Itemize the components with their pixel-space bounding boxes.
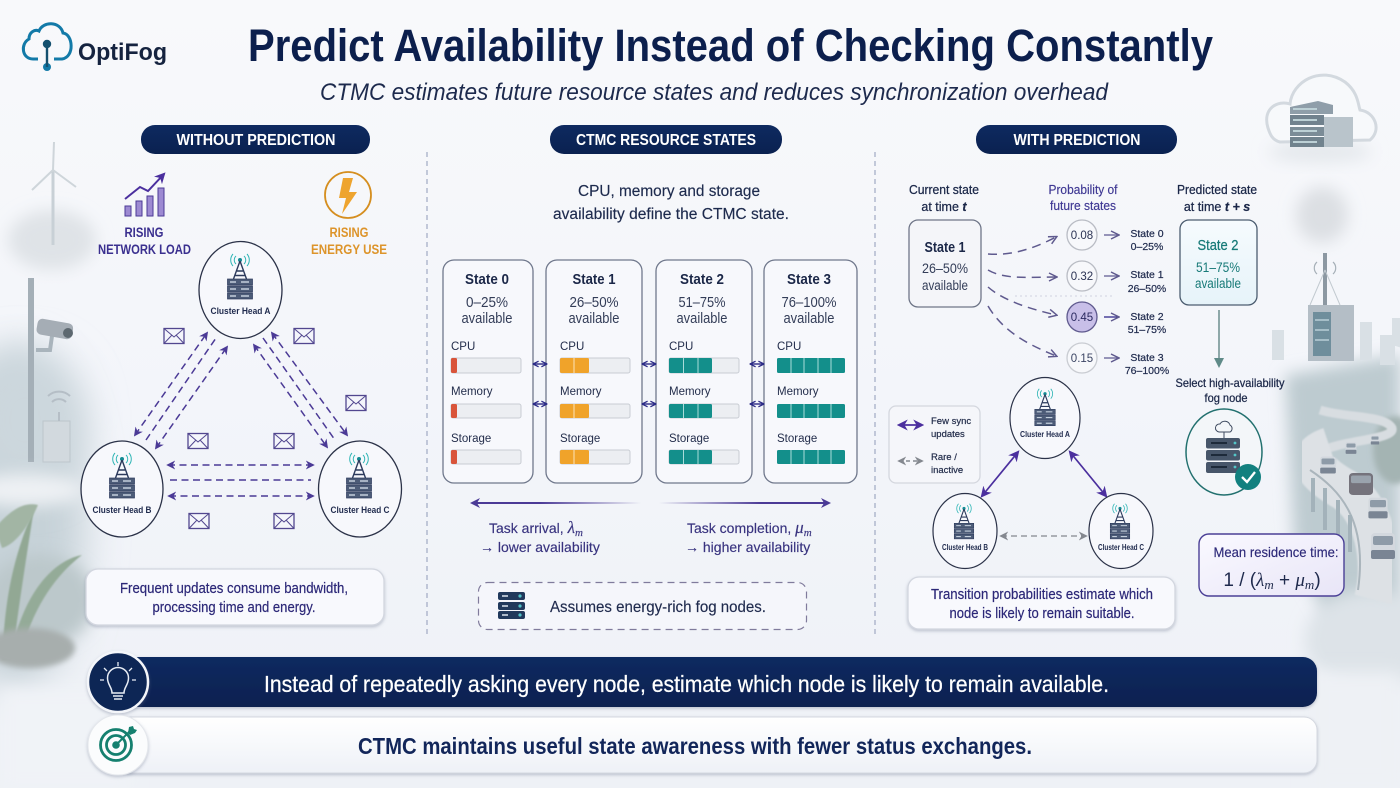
node: cluster head A [199,242,282,338]
box: predicted state 2: 51–75% [1196,260,1240,275]
sync arrows right network [982,452,1106,536]
banner: estimate which node [118,657,1317,707]
callout: transition probabilities: node is likely to remain suitable. [950,606,1134,622]
card: state 2 [656,260,752,483]
card: state 2: available [676,311,728,327]
icon: rising energy use [325,172,371,218]
heading: current state: Current state [909,183,979,197]
heading: probability of future states [1048,183,1118,213]
callout: frequent updates: processing time and energy. [152,600,316,616]
label: rising energy use [311,225,387,257]
node: cluster head B (right): Cluster Head B [942,543,988,552]
icon: rising network load chart [125,174,164,216]
card: state 1: Memory [560,386,602,398]
node: cluster head C: Cluster Head C [330,505,390,516]
card: state 1 [546,260,642,483]
card: state 0: Memory [451,386,493,398]
heading pill: with prediction [976,125,1177,154]
card: state 1: Storage [560,433,600,445]
card: state 3: 76–100% [782,295,837,311]
right fog scenery [1267,75,1400,690]
future state labels: State 1 [1130,269,1164,281]
heading: predicted state: at time t + s [1184,200,1250,214]
probability node: 0.08: 0.08 [1071,230,1093,242]
node: cluster head C (right): Cluster Head C [1098,543,1144,552]
callout: mean residence time: + [1274,570,1295,591]
probability node: 0.15: 0.15 [1071,353,1093,365]
intro text: availability define the CTMC state. [553,206,789,223]
node: cluster head C [318,441,402,537]
legend: inactive [931,465,963,476]
heading pill: CTMC resource states: CTMC RESOURCE STATES [576,132,756,149]
heading: probability of future states: Probability of [1048,183,1118,197]
note: energy-rich fog nodes [478,582,806,630]
text: task completion: Task completion, [687,520,795,536]
icon: target [88,715,148,775]
label: select high-availability fog node: fog node [1204,391,1248,405]
label: rising network load: NETWORK LOAD [98,242,191,257]
box: predicted state 2: State 2 [1198,237,1238,254]
label: rising energy use: ENERGY USE [311,242,387,257]
panel: CTMC resource states [443,125,857,630]
future state labels: State 3 [1130,352,1164,364]
future state labels: State 2 [1130,311,1164,323]
heading: predicted state: Predicted state [1177,183,1257,197]
logo: OptiFog [23,24,167,71]
heading: probability of future states: future states [1050,199,1116,213]
sync arrows between cluster heads [135,333,347,496]
panel: with prediction [889,125,1344,629]
callout: mean residence time: 1 / (λ [1223,570,1264,591]
banner: estimate which node: Instead of repeatedly asking every node, estimate which node is likely to remain available. [264,671,1109,697]
legend [889,406,980,483]
probability node: 0.32 [1067,261,1097,291]
intro text: CPU, memory and storage [578,183,760,200]
probability node: 0.45 highlighted [1067,302,1097,332]
card: state 3: State 3 [787,271,831,288]
label: rising energy use: RISING [330,225,368,240]
callout: frequent updates: Frequent updates consume bandwidth, [120,581,348,597]
box: predicted state 2 [1180,220,1257,305]
card: state 2: Memory [669,386,711,398]
card: state 2: State 2 [680,271,724,288]
banner: maintains state awareness [118,717,1317,773]
future state labels: 0–25% [1131,241,1163,253]
text: task completion: → higher availability [685,539,810,555]
card: state 1: available [568,311,620,327]
card: state 2: Storage [669,433,709,445]
text: task arrival: → lower availability [480,539,600,555]
text: task arrival: λ [567,518,575,537]
heading: current state [909,183,979,214]
box: current state 1 [909,220,981,307]
callout: mean residence time: m [1264,577,1274,592]
icon: server stack [498,592,525,619]
node: cluster head B: Cluster Head B [92,505,152,516]
label: rising network load [98,225,191,257]
dashed probability arrows [988,237,1056,356]
card: state 0: 0–25% [466,295,508,311]
left fog scenery [0,142,96,690]
probability node: 0.08 [1067,220,1097,250]
card: state 3: Storage [777,433,817,445]
probability node: 0.15 [1067,343,1097,373]
card: state 0: Storage [451,433,491,445]
heading pill: with prediction: WITH PREDICTION [1014,132,1140,149]
heading: predicted state [1177,183,1257,214]
card: state 0: CPU [451,341,475,353]
future state labels: 76–100% [1125,365,1169,377]
node: cluster head A: Cluster Head A [210,306,271,317]
icon: cloud network [23,24,71,71]
intro text [553,183,789,223]
title: Predict Availability Instead of Checking Constantly [248,20,1213,71]
card: state 1: CPU [560,341,584,353]
card: state 3: Memory [777,386,819,398]
legend: updates [931,429,965,440]
probability node: 0.45 highlighted: 0.45 [1071,312,1093,324]
legend: Few sync [931,416,971,427]
label: rising network load: RISING [124,225,164,240]
callout: mean residence time [1199,534,1344,596]
logo wordmark: OptiFog [78,39,167,66]
text: task completion: μ [794,518,804,537]
label: select high-availability fog node: Select high-availability [1176,376,1284,390]
callout: mean residence time: m [1305,577,1314,592]
short arrows to future states [1104,235,1118,358]
subtitle: CTMC estimates future resource states and reduces synchronization overhead [320,79,1109,106]
node: cluster head A (right): Cluster Head A [1020,429,1070,439]
callout: transition probabilities [908,577,1175,629]
legend: Rare / [931,452,957,463]
card: state 3: available [784,311,834,327]
banner: maintains state awareness: CTMC maintains useful state awareness with fewer status exchanges. [358,733,1032,759]
box: current state 1: 26–50% [922,261,968,276]
box: predicted state 2: available [1195,276,1241,291]
node: cluster head B [81,441,163,537]
text: task arrival: m [575,527,583,539]
heading pill: without prediction [141,125,370,154]
node: cluster head C (right) [1089,494,1153,568]
card: state 1: 26–50% [570,295,619,311]
callout: frequent updates [86,569,384,625]
node: cluster head B (right) [933,494,997,568]
divider right [874,152,876,634]
heading: current state: at time t [921,200,967,214]
icon: selected fog node [1186,409,1262,495]
text: task completion: m [804,527,812,539]
note: energy-rich fog nodes: Assumes energy-rich fog nodes. [550,599,766,616]
text: task arrival: Task arrival, [489,520,568,536]
fog veil over lower corners [0,672,1400,788]
box: current state 1: State 1 [924,239,966,256]
arrow: to selected node [1214,310,1224,368]
callout: mean residence time: μ [1294,570,1305,591]
card: state 2: CPU [669,341,693,353]
card: state 3: CPU [777,341,801,353]
divider left [426,152,428,634]
label: select high-availability fog node [1176,376,1284,405]
box: current state 1: available [922,278,968,293]
card: state 0 [443,260,533,483]
probability node: 0.32: 0.32 [1071,271,1093,283]
card: state 1: State 1 [572,271,616,288]
icon: light bulb [88,652,148,712]
heading pill: CTMC resource states [550,125,782,154]
heading pill: without prediction: WITHOUT PREDICTION [176,132,336,149]
future state labels: 26–50% [1128,283,1166,295]
future state labels: 51–75% [1128,324,1166,336]
faint dotted arrow [1015,295,1112,297]
card: state 3 [764,260,857,483]
arrow: task completion direction [659,498,831,508]
message envelopes [164,328,366,528]
card: state 0: State 0 [465,271,509,288]
future state labels: State 0 [1130,228,1164,240]
card: state 2: 51–75% [678,295,726,311]
panel: without prediction [81,125,402,625]
callout: mean residence time: Mean residence time: [1214,544,1338,560]
card: state 0: available [462,311,512,327]
node: cluster head A (right) [1010,378,1080,458]
arrow: task arrival direction [470,498,641,508]
callout: mean residence time: ) [1314,570,1321,591]
transition arrows between states [533,364,764,404]
callout: transition probabilities: Transition probabilities estimate which [931,587,1153,603]
future state labels [1125,228,1169,377]
